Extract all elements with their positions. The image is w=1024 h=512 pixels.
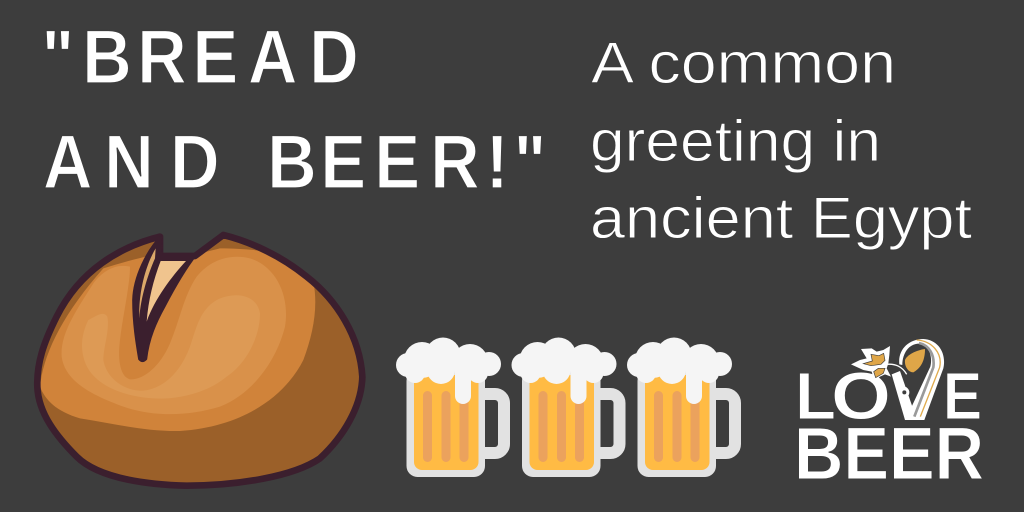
icon: beer mug 2	[512, 338, 620, 477]
logo: Love Beer: E	[943, 359, 982, 434]
title: Bread and beer	[42, 16, 546, 205]
title: Bread and beer: "	[514, 121, 546, 205]
icon: beer mug 1	[396, 338, 504, 477]
icon: bread loaf	[37, 235, 362, 486]
logo: Love Beer: BEER	[794, 412, 984, 495]
logo: Love Beer: L	[795, 359, 836, 434]
title: Bread and beer: BEER!	[267, 121, 509, 205]
subtitle: A common greeting in ancient Egypt: ancient Egypt	[590, 186, 972, 251]
logo: Love Beer: O	[831, 359, 891, 434]
icon: hop V	[892, 339, 944, 420]
title: Bread and beer: "	[42, 16, 74, 100]
title: Bread and beer: AND	[43, 121, 220, 205]
subtitle: A common greeting in ancient Egypt: greeting in	[590, 109, 881, 174]
subtitle: A common greeting in ancient Egypt: A common	[591, 31, 896, 96]
logo: Love Beer	[794, 339, 984, 495]
title: Bread and beer: BREAD	[82, 16, 359, 100]
icon: hop leaf	[851, 346, 907, 381]
icon: beer mug 3	[627, 338, 735, 477]
subtitle: A common greeting in ancient Egypt	[590, 31, 972, 251]
